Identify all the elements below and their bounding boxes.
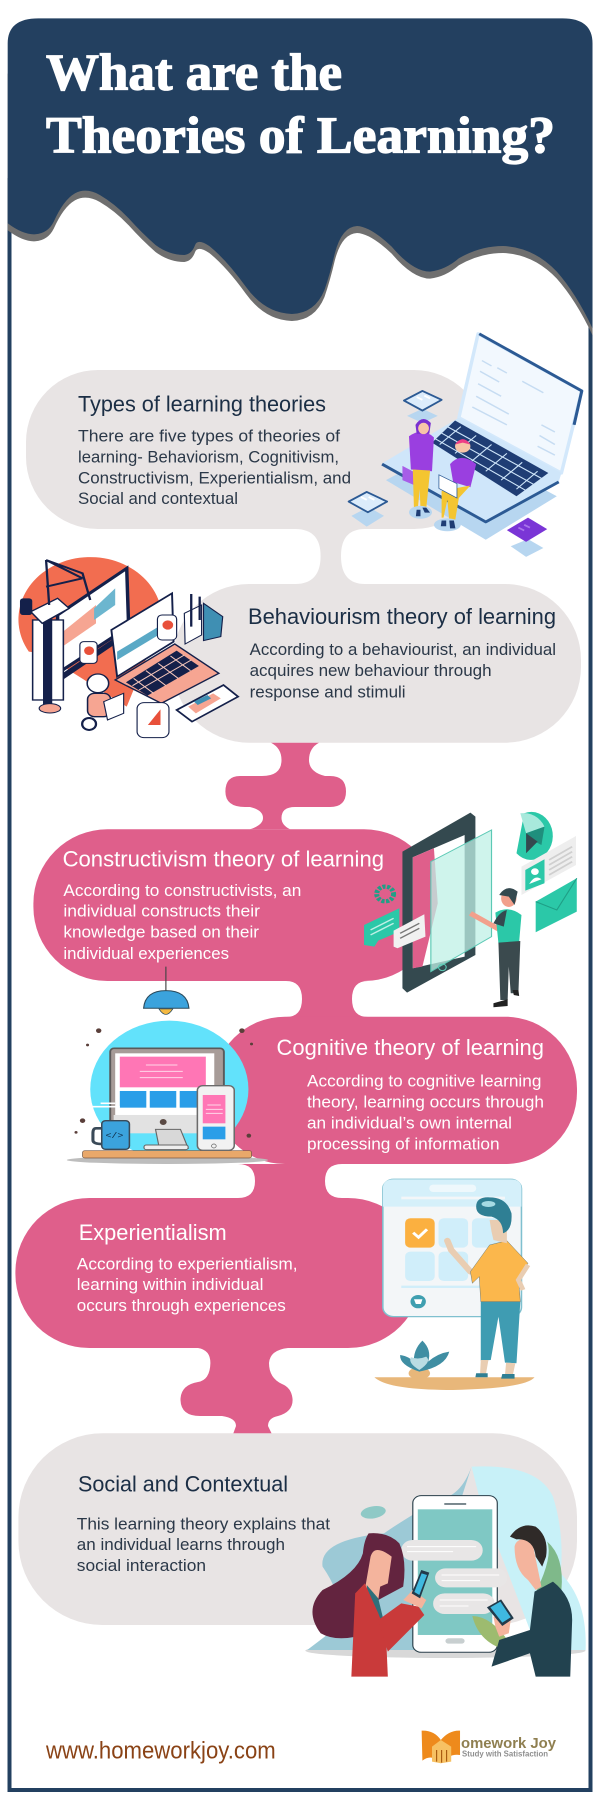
title: Theories of Learning? bbox=[46, 108, 555, 165]
illustration: man choosing tiles on app screen bbox=[374, 1179, 535, 1390]
text: types of learning theories: learning- Behaviorism, Cognitivism, bbox=[78, 447, 339, 466]
pink connector and small blob bbox=[225, 743, 346, 829]
panel: constructivism theory bbox=[33, 829, 438, 981]
website url: www.homeworkjoy.com bbox=[45, 1737, 276, 1764]
panel: behaviourism theory bbox=[173, 584, 581, 743]
pink connector between constructivism and cognitive bbox=[286, 981, 368, 1017]
text: types of learning theories: Social and contextual bbox=[78, 489, 238, 508]
panel: experientialism bbox=[15, 1198, 422, 1348]
title: What are the bbox=[46, 44, 342, 101]
logo: homework joy: omework Joy bbox=[461, 1735, 557, 1752]
heading: cognitive theory: Cognitive theory of learning bbox=[276, 1035, 544, 1060]
header banner with dripping edge bbox=[8, 18, 593, 335]
text: types of learning theories bbox=[78, 427, 351, 508]
text: constructivism theory: According to constructivists, an bbox=[63, 881, 301, 900]
panel: social and contextual bbox=[18, 1433, 577, 1625]
text: behaviourism theory bbox=[250, 640, 556, 701]
text: constructivism theory: individual experiences bbox=[63, 944, 229, 963]
pink connector between cognitive and experientialism bbox=[238, 1164, 342, 1198]
heading: types of learning theories: Types of learning theories bbox=[78, 392, 326, 417]
text: cognitive theory: processing of information bbox=[307, 1135, 500, 1154]
text: constructivism theory: knowledge based on their bbox=[63, 923, 259, 942]
heading: social and contextual: Social and Contextual bbox=[78, 1472, 288, 1497]
text: experientialism: occurs through experiences bbox=[77, 1296, 286, 1315]
text: cognitive theory: theory, learning occurs through bbox=[307, 1093, 544, 1112]
logo: homework joy bbox=[422, 1731, 557, 1763]
panel: types of learning theories bbox=[26, 370, 486, 584]
title bbox=[46, 44, 555, 165]
illustration: tablet with man and icons bbox=[364, 812, 577, 1007]
icon: open book bbox=[422, 1731, 460, 1763]
text: types of learning theories: There are five types of theories of bbox=[78, 427, 340, 446]
text: behaviourism theory: According to a behaviourist, an individual bbox=[250, 640, 556, 659]
text: cognitive theory: an individual’s own internal bbox=[307, 1114, 512, 1133]
text: behaviourism theory: response and stimuli bbox=[250, 682, 406, 701]
panel: cognitive theory bbox=[213, 1017, 577, 1164]
logo: homework joy: Study with Satisfaction bbox=[462, 1750, 548, 1759]
heading: constructivism theory: Constructivism theory of learning bbox=[63, 847, 384, 872]
text: social and contextual: an individual learns through bbox=[77, 1535, 285, 1554]
text: experientialism bbox=[77, 1254, 298, 1315]
illustration: two people with smartphones and chat bubbles bbox=[305, 1466, 586, 1677]
heading: behaviourism theory: Behaviourism theory of learning bbox=[248, 604, 556, 629]
text: social and contextual bbox=[77, 1514, 330, 1575]
heading: experientialism: Experientialism bbox=[79, 1220, 227, 1245]
text: behaviourism theory: acquires new behaviour through bbox=[250, 661, 492, 680]
text: experientialism: learning within individual bbox=[77, 1275, 263, 1294]
text: social and contextual: social interaction bbox=[77, 1556, 206, 1575]
pink connector and lower blob bbox=[180, 1348, 293, 1434]
text: cognitive theory bbox=[307, 1072, 544, 1154]
text: constructivism theory: individual constructs their bbox=[63, 902, 260, 921]
text: social and contextual: This learning theory explains that bbox=[77, 1514, 330, 1533]
text: constructivism theory bbox=[63, 881, 301, 963]
illustration: laptop with two people bbox=[349, 334, 582, 557]
text: cognitive theory: According to cognitive learning bbox=[307, 1072, 541, 1091]
illustration: lamp and desktop workstation: </> bbox=[105, 1131, 124, 1141]
text: types of learning theories: Constructivism, Experientialism, and bbox=[78, 468, 351, 487]
illustration: isometric web design devices bbox=[18, 557, 238, 738]
illustration: lamp and desktop workstation bbox=[67, 967, 268, 1164]
text: experientialism: According to experientialism, bbox=[77, 1254, 298, 1273]
